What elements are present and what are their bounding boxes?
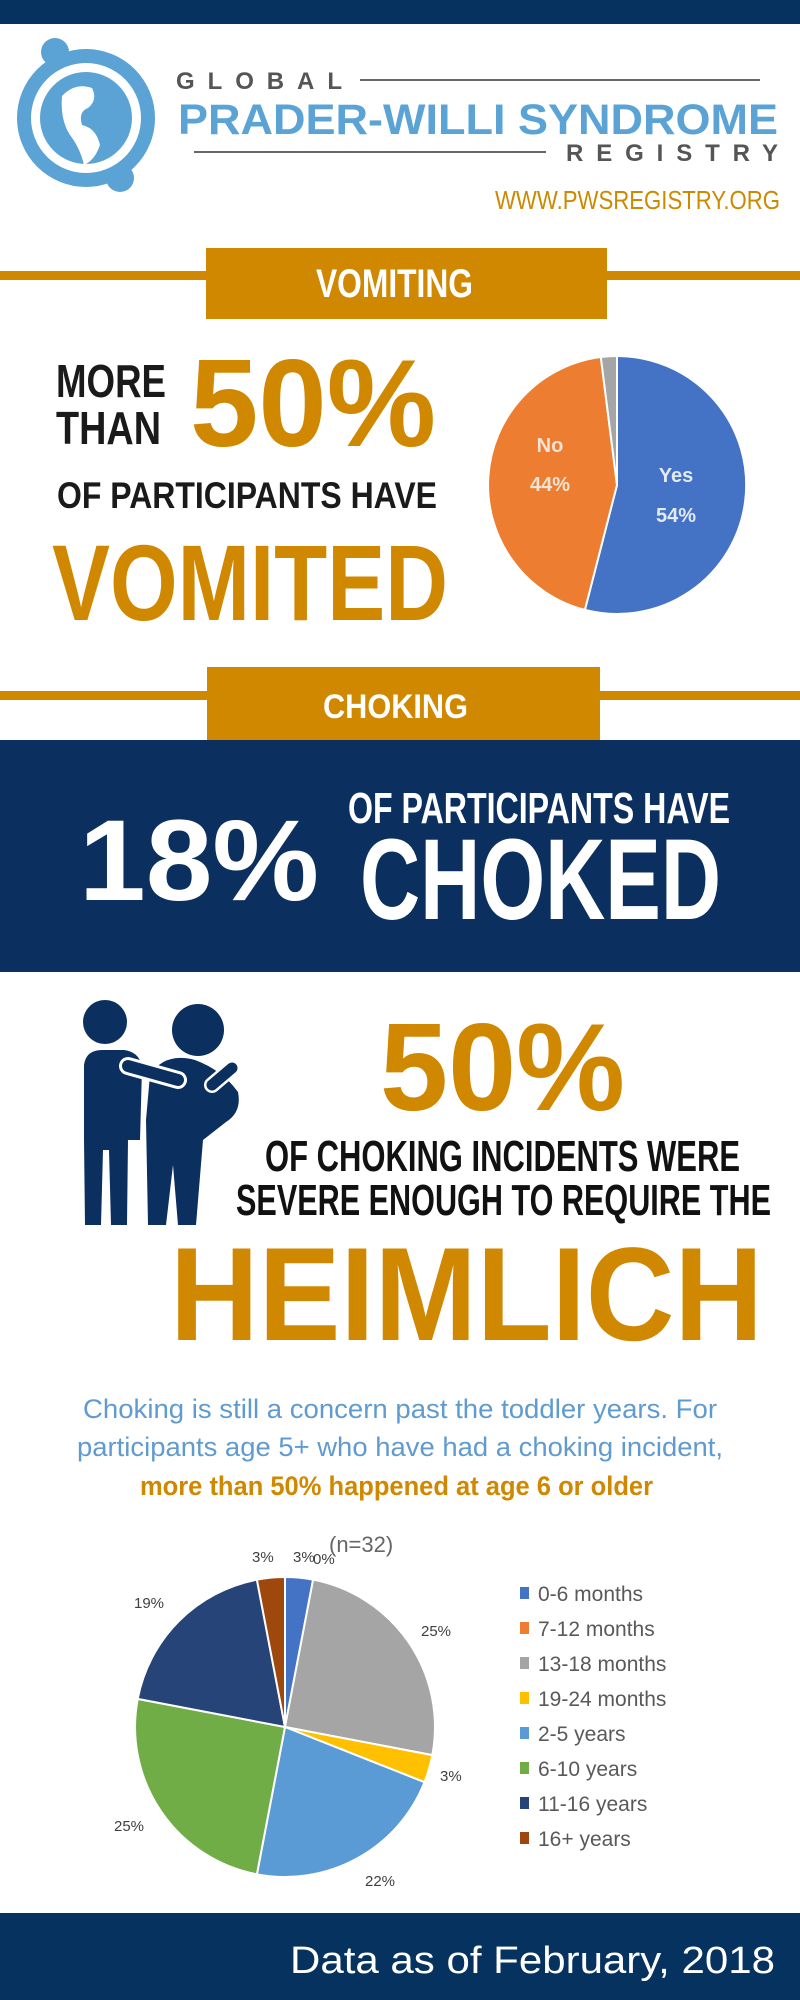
legend: 0-6 months [538,1583,643,1606]
vomiting stat text: THAN [56,402,161,454]
vomiting stat text: 50% [190,335,436,473]
heimlich stat text: 50% [380,999,625,1137]
legend: 2-5 years [538,1723,626,1746]
footer [0,1913,800,2000]
pie chart: age at choking: 25% [421,1623,451,1640]
pie chart: age at choking: 22% [365,1873,395,1890]
panel: choking: 18% [79,797,319,925]
text block: toddler note: Choking is still a concern past the toddler years. For [83,1394,717,1424]
text block: toddler note: more than 50% happened at age 6 or older [140,1471,653,1501]
legend: 11-16 years [538,1793,647,1816]
logo [24,38,148,192]
pie chart: age at choking: 3% [293,1549,315,1566]
pie chart: vomiting: 44% [530,474,570,496]
pie chart: vomiting: No [537,435,563,457]
logo text: GLOBAL [176,68,342,95]
text block: toddler note [77,1394,723,1501]
text block: toddler note: participants age 5+ who have had a choking incident, [77,1432,723,1462]
heading: vomiting [0,248,800,319]
vomiting stat text: VOMITED [52,522,448,643]
pie chart: age at choking: 3% [440,1768,462,1785]
vomiting stat text: OF PARTICIPANTS HAVE [57,475,437,516]
vomiting stat text: MORE [56,355,166,407]
heading: vomiting: VOMITING [316,262,473,306]
icon: heimlich figures [83,1000,239,1225]
pie chart: age at choking: 25% [114,1818,144,1835]
pie chart: age at choking: (n=32) [329,1532,393,1557]
panel: choking [0,667,800,972]
heimlich stat text: HEIMLICH [170,1221,763,1369]
heimlich stat text [170,999,771,1369]
pie chart: age at choking: 0% [313,1551,335,1568]
pie chart: vomiting: Yes [659,465,693,487]
legend: 7-12 months [538,1618,655,1641]
legend [520,1583,666,1851]
pie chart: vomiting: 54% [656,505,696,527]
pie chart: vomiting [488,356,746,614]
legend: 19-24 months [538,1688,666,1711]
pie chart: age at choking [114,1532,462,1890]
pie chart: age at choking: 19% [134,1595,164,1612]
logo text [176,68,778,167]
top bar [0,0,800,24]
legend: 13-18 months [538,1653,666,1676]
logo text: PRADER-WILLI SYNDROME [178,96,778,144]
vomiting stat text [52,335,448,643]
pie chart: age at choking: 3% [252,1549,274,1566]
logo text: REGISTRY [566,140,778,167]
panel: choking: CHOKING [323,688,468,726]
legend: 6-10 years [538,1758,637,1781]
footer: Data as of February, 2018 [290,1940,775,1982]
legend: 16+ years [538,1828,631,1851]
